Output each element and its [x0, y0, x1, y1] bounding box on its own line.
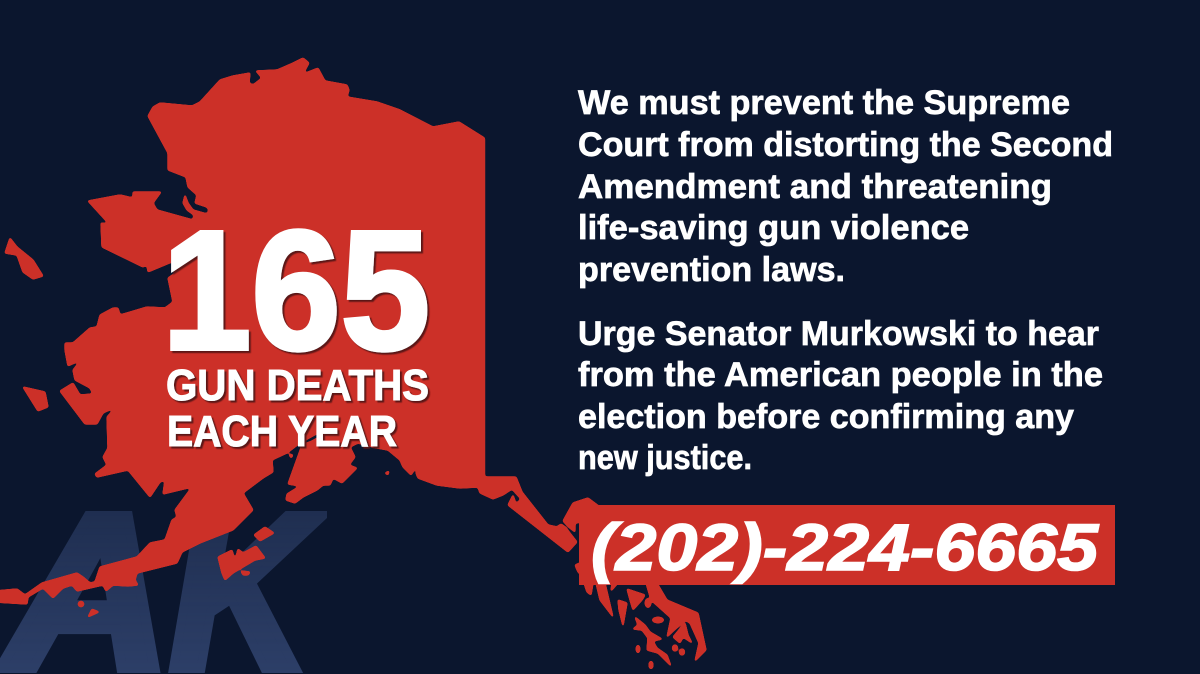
- subheading: [166, 361, 429, 456]
- paragraph: call to action: new justice.: [578, 439, 752, 477]
- panhandle lobe: [673, 623, 692, 643]
- Kodiak Island: [218, 546, 265, 580]
- paragraph: call to action: election before confirming any: [578, 398, 1074, 436]
- paragraph: Supreme Court: life-saving gun violence: [578, 209, 969, 247]
- paragraph: Supreme Court: prevention laws.: [578, 251, 845, 289]
- panhandle main band: [646, 583, 706, 661]
- paragraph: Supreme Court: Court from distorting the Second: [578, 126, 1113, 164]
- St. Lawrence Island: [5, 238, 43, 279]
- panhandle islands: [618, 589, 671, 666]
- Afognak Island: [254, 527, 274, 541]
- panhandle north: [563, 498, 600, 576]
- paragraph: call to action: [578, 315, 1103, 477]
- small islands: [88, 454, 389, 617]
- paragraph: Supreme Court: We must prevent the Supreme: [578, 84, 1070, 122]
- Nunivak Island: [23, 387, 48, 411]
- headline number: 165: [162, 196, 430, 386]
- paragraph: Supreme Court: Amendment and threatening: [578, 168, 1052, 206]
- subheading: GUN DEATHS: [166, 361, 429, 410]
- map of Alaska: [0, 58, 706, 669]
- panhandle west strip: [584, 583, 618, 617]
- panhandle islets: [636, 598, 685, 669]
- paragraph: call to action: from the American people in the: [578, 356, 1103, 394]
- phone number banner: (202)-224-6665: [591, 510, 1099, 584]
- state abbreviation watermark: [0, 511, 327, 673]
- paragraph: call to action: Urge Senator Murkowski to hear: [578, 315, 1099, 353]
- subheading: EACH YEAR: [167, 407, 397, 456]
- Aleutian dot: [78, 601, 84, 607]
- paragraph: Supreme Court: [578, 84, 1113, 289]
- mainland: [0, 58, 577, 604]
